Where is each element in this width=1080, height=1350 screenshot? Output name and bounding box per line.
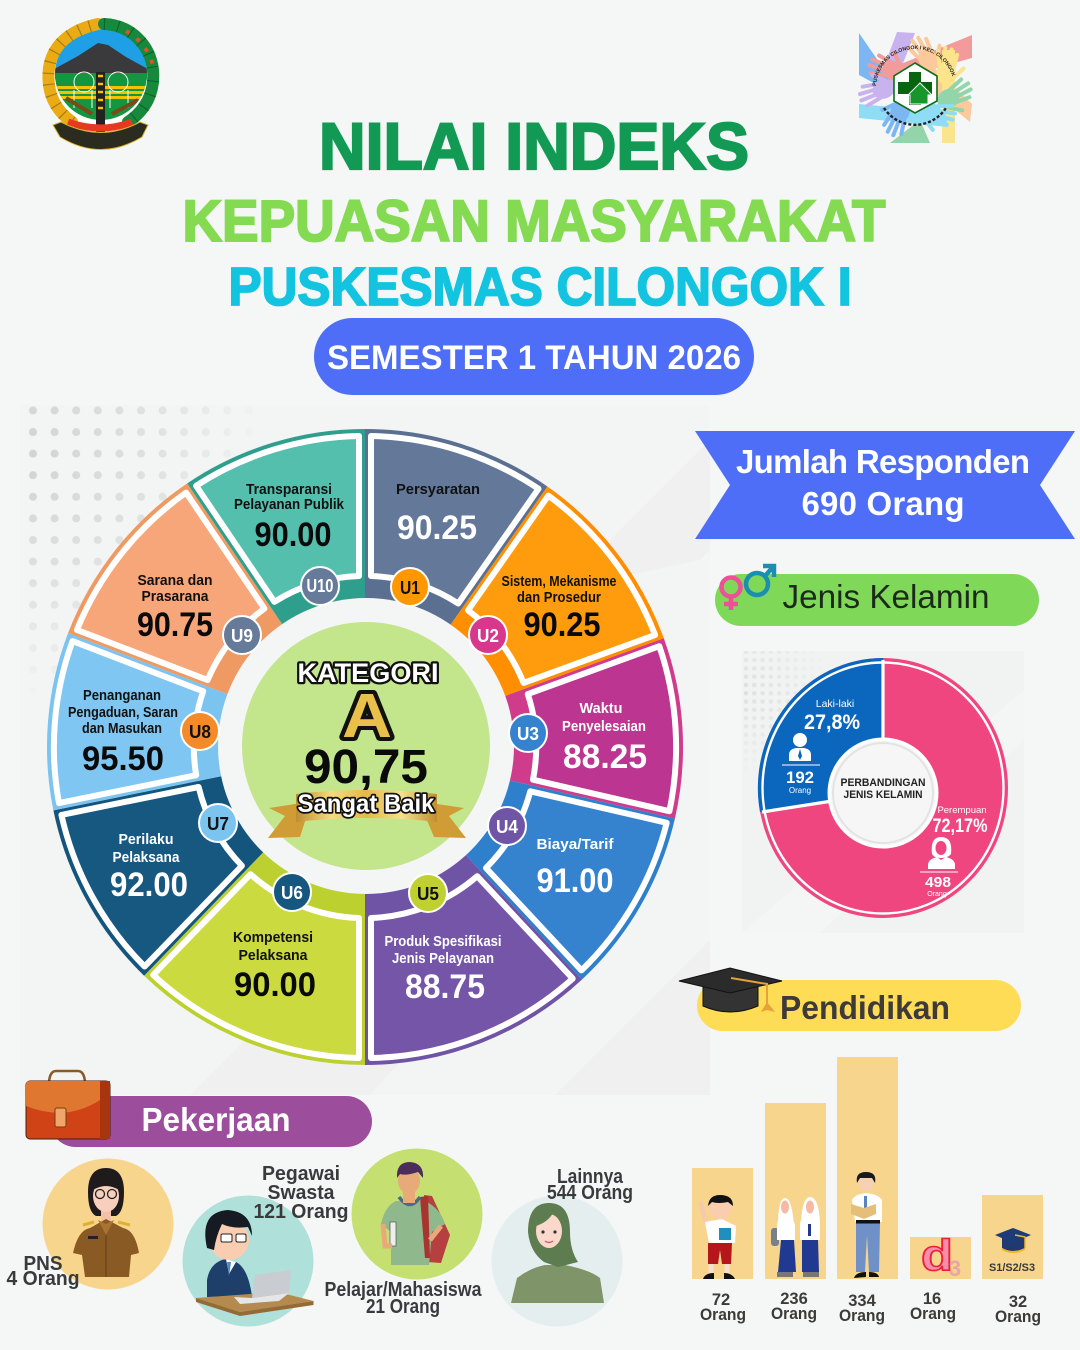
circle: student figure [352, 1148, 482, 1280]
respondent banner: Jumlah Responden [736, 443, 1030, 480]
title: NILAI INDEKS: NILAI INDEKS [319, 109, 749, 183]
segment U9 Sarana dan Prasarana: Sarana dan [138, 572, 212, 589]
donut centre label: JENIS KELAMIN [844, 789, 923, 801]
female stats: Perempuan [937, 805, 987, 816]
segment U6 Kompetensi Pelaksana [153, 873, 359, 1058]
bar labels: 334 [848, 1292, 877, 1310]
segment U7 Perilaku Pelaksana: Perilaku [118, 831, 174, 848]
title: KEPUASAN MASYARAKAT: KEPUASAN MASYARAKAT [182, 189, 886, 254]
segment U2 Sistem, Mekanisme dan Prosedur: 90.25 [524, 606, 600, 644]
label: Sangat Baik: Sangat Baik [298, 790, 435, 818]
label: Pegawai Swasta: 121 Orang [254, 1201, 348, 1223]
label: Lainnya: Lainnya [557, 1166, 624, 1188]
bar: D3 16 orang: 3 [949, 1256, 961, 1281]
wheel coloured sectors [47, 429, 683, 1065]
segment U7 Perilaku Pelaksana: Pelaksana [112, 849, 180, 866]
label: Pelajar/Mahasiswa [324, 1279, 482, 1318]
donut chart panel [744, 651, 1008, 918]
wheel inner white ring [218, 598, 514, 894]
donut centre label: PERBANDINGAN [840, 777, 926, 789]
label: Pelajar/Mahasiswa: Pelajar/Mahasiswa [324, 1279, 482, 1301]
bar: D3 16 orang [910, 1231, 971, 1281]
bar labels: 16 [923, 1290, 941, 1308]
segment U5 Produk Spesifikasi Jenis Pelayanan: 88.75 [405, 968, 485, 1006]
segment U10 Transparansi Pelayanan Publik: U10 [306, 576, 334, 596]
label: PNS: PNS [24, 1253, 62, 1275]
segment U8 Penanganan Pengaduan: 95.50 [82, 740, 164, 778]
semester pill [314, 318, 754, 395]
segment U4 Biaya/Tarif: Biaya/Tarif [536, 836, 615, 853]
segment U2 Sistem, Mekanisme dan Prosedur [468, 496, 655, 683]
icon: graduation cap [679, 968, 782, 1012]
segment U9 Sarana dan Prasarana [77, 493, 264, 680]
segment U3 Waktu Penyelesaian: U3 [517, 724, 539, 744]
segment U3 Waktu Penyelesaian [509, 646, 676, 811]
segment U3 Waktu Penyelesaian: Penyelesaian [562, 718, 646, 735]
label: Pelajar/Mahasiswa: 21 Orang [366, 1296, 440, 1318]
icon: briefcase [26, 1071, 110, 1139]
female stats: 72,17% [932, 816, 988, 837]
label: KATEGORI: KATEGORI [298, 658, 438, 688]
occupation heading pill [50, 1096, 372, 1147]
centre result circle [242, 622, 490, 870]
segment U3 Waktu Penyelesaian: Waktu [580, 700, 622, 717]
logo: Puskesmas Cilongok I hands [858, 32, 973, 143]
wheel background panel [28, 406, 231, 670]
label: Pegawai Swasta: Swasta [268, 1182, 335, 1204]
bar labels [700, 1290, 1041, 1326]
segment U4 Biaya/Tarif: 91.00 [536, 862, 614, 900]
segment U5 Produk Spesifikasi Jenis Pelayanan: Produk Spesifikasi [384, 933, 502, 950]
segment U10 Transparansi Pelayanan Publik: 90.00 [254, 516, 332, 554]
label: Lainnya: 544 Orang [547, 1182, 633, 1204]
icon: gender symbols [722, 566, 774, 610]
segment U1 Persyaratan: 90.25 [397, 509, 477, 547]
segment U1 Persyaratan [371, 436, 538, 606]
segment U7 Perilaku Pelaksana [61, 787, 242, 966]
segment U6 Kompetensi Pelaksana: Pelaksana [238, 947, 308, 964]
label: PNS [6, 1253, 80, 1290]
respondent banner [695, 431, 1075, 539]
segment U6 Kompetensi Pelaksana: 90.00 [234, 966, 316, 1004]
segment U4 Biaya/Tarif: U4 [496, 817, 518, 837]
male stats: Laki-laki [816, 698, 854, 710]
education heading pill: Pendidikan [780, 989, 950, 1026]
logo: Puskesmas Cilongok I hands: PUSKESMAS CILONGOK I KEC. CILONGOK [872, 45, 956, 86]
label: Pegawai Swasta [254, 1163, 348, 1223]
circle: PNS figure [42, 1158, 174, 1290]
female stats: Orang [927, 891, 947, 898]
bar labels: Orang [910, 1305, 956, 1323]
overall score: 90,75 [304, 741, 428, 794]
bar: S1/S2/S3 32 orang [982, 1195, 1043, 1279]
semester pill: SEMESTER 1 TAHUN 2026 [327, 339, 741, 377]
segment U1 Persyaratan: Persyaratan [396, 481, 480, 498]
segment U9 Sarana dan Prasarana: Prasarana [142, 588, 209, 605]
female stats: 498 [925, 875, 951, 891]
segment U5 Produk Spesifikasi Jenis Pelayanan: U5 [417, 884, 439, 904]
male stats: 192 [786, 768, 814, 787]
segment U8 Penanganan Pengaduan [54, 641, 219, 803]
segment U10 Transparansi Pelayanan Publik: Transparansi [246, 481, 332, 498]
segment U2 Sistem, Mekanisme dan Prosedur: U2 [477, 626, 499, 646]
segment U5 Produk Spesifikasi Jenis Pelayanan [371, 874, 573, 1058]
female stats [920, 805, 988, 898]
respondent banner: 690 Orang [802, 485, 964, 522]
circle: other occupation figure [492, 1196, 622, 1326]
bar labels: 236 [780, 1290, 808, 1308]
segment U6 Kompetensi Pelaksana: Kompetensi [233, 929, 313, 946]
gold ribbon [268, 790, 466, 838]
pink sector [758, 658, 1008, 918]
bar: D3 16 orang: d [921, 1231, 953, 1280]
label: Pegawai Swasta: Pegawai [262, 1163, 340, 1185]
gender heading pill [715, 574, 1039, 626]
segment U8 Penanganan Pengaduan: Penanganan [83, 687, 161, 704]
donut centre label [829, 739, 937, 847]
label: PNS: 4 Orang [6, 1268, 80, 1290]
bar labels: Orang [995, 1308, 1041, 1326]
gender heading pill: Jenis Kelamin [782, 578, 990, 615]
grade letter A: A [342, 682, 392, 751]
segment U2 Sistem, Mekanisme dan Prosedur: Sistem, Mekanisme [502, 573, 616, 590]
segment U10 Transparansi Pelayanan Publik [196, 436, 359, 605]
segment U2 Sistem, Mekanisme dan Prosedur: dan Prosedur [517, 589, 601, 606]
segment U5 Produk Spesifikasi Jenis Pelayanan: Jenis Pelayanan [392, 950, 494, 967]
title: PUSKESMAS CILONGOK I: PUSKESMAS CILONGOK I [228, 257, 852, 317]
segment U8 Penanganan Pengaduan: Pengaduan, Saran [68, 704, 178, 721]
bar labels: Orang [839, 1307, 885, 1325]
occupation heading pill: Pekerjaan [142, 1101, 290, 1138]
logo: Kabupaten Banyumas emblem [48, 20, 154, 150]
segment U8 Penanganan Pengaduan: dan Masukan [82, 720, 162, 737]
segment U3 Waktu Penyelesaian: 88.25 [563, 738, 647, 776]
segment U8 Penanganan Pengaduan: U8 [189, 722, 211, 742]
segment U7 Perilaku Pelaksana: U7 [207, 814, 229, 834]
label: Lainnya [547, 1166, 633, 1204]
segment U4 Biaya/Tarif [486, 791, 667, 970]
segment U9 Sarana dan Prasarana: U9 [231, 626, 253, 646]
bar: S1/S2/S3 32 orang: S1/S2/S3 [989, 1262, 1035, 1274]
male stats: Orang [789, 786, 811, 795]
segment U7 Perilaku Pelaksana: 92.00 [110, 866, 188, 904]
male stats [782, 698, 860, 795]
male stats: 27,8% [804, 711, 860, 734]
bar: SMP 236 orang [765, 1103, 826, 1279]
blue sector [758, 658, 883, 812]
bar labels: Orang [700, 1306, 746, 1324]
segment U1 Persyaratan: U1 [400, 578, 420, 598]
circle: private employee figure [182, 1196, 314, 1326]
bar: SD 72 orang [692, 1168, 753, 1279]
bar labels: Orang [771, 1305, 817, 1323]
segment U9 Sarana dan Prasarana: 90.75 [137, 606, 213, 644]
bar labels: 72 [712, 1291, 730, 1309]
education heading pill [697, 980, 1021, 1031]
segment U6 Kompetensi Pelaksana: U6 [281, 883, 303, 903]
segment U10 Transparansi Pelayanan Publik: Pelayanan Publik [234, 496, 345, 513]
bar: SMA 334 orang [837, 1057, 898, 1279]
bar labels: 32 [1009, 1293, 1027, 1311]
